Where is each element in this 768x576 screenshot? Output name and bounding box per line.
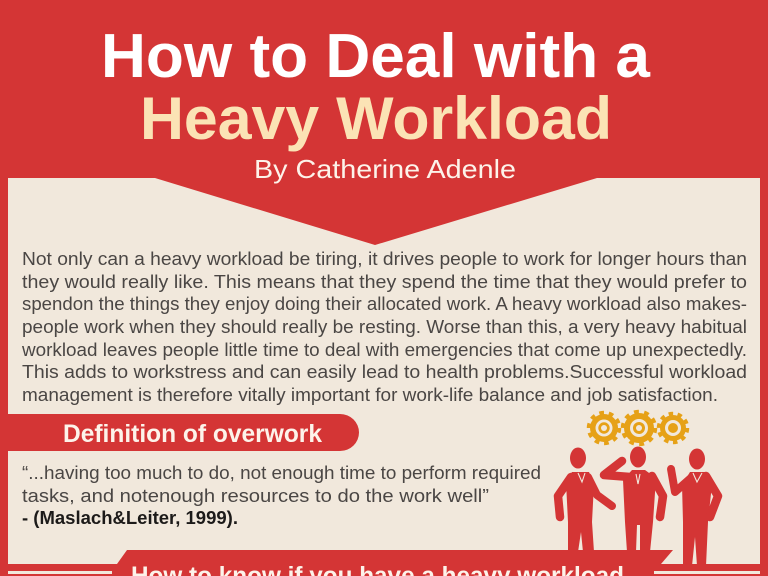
figure: saluting man — [604, 446, 663, 552]
heading: definition of overwork — [8, 414, 359, 451]
heading: definition of overwork: Definition of overwork — [63, 420, 322, 448]
intro text block: workload leaves people little time to deal with emergencies that come up unexpectedly. — [21, 340, 747, 360]
definition quote: - (Maslach&Leiter, 1999). — [22, 508, 238, 528]
panel: cream content area — [8, 178, 760, 564]
definition quote: “...having too much to do, not enough time to perform required — [22, 463, 541, 483]
intro text block — [21, 249, 747, 405]
definition quote: tasks, and notenough resources to do the work well” — [22, 486, 489, 506]
icon: three businessmen — [558, 446, 718, 566]
intro text block: spendon the things they enjoy doing their allocated work. A heavy workload also makes- — [22, 294, 747, 314]
figure: right man — [671, 448, 718, 566]
intro text block: Not only can a heavy workload be tiring, it drives people to work for longer hours than — [22, 249, 747, 269]
icon: three gears — [589, 412, 687, 444]
byline: By Catherine Adenle — [254, 154, 516, 184]
title — [101, 22, 651, 152]
intro text block: management is therefore vitally important for work-life balance and job satisfaction. — [22, 385, 718, 405]
intro text block: people work when they should really be resting. Worse than this, a very heavy habitual — [22, 317, 747, 337]
intro text block: they would really like. This means that they spend the time that they would prefer to — [22, 272, 747, 292]
title: Heavy Workload — [140, 85, 612, 152]
heading band: how to know — [0, 550, 768, 576]
intro text block: This adds to workstress and can easily lead to health problems.Successful workload — [22, 362, 747, 382]
definition quote — [22, 463, 541, 528]
figure: left man — [558, 448, 612, 552]
title: How to Deal with a — [101, 22, 651, 91]
